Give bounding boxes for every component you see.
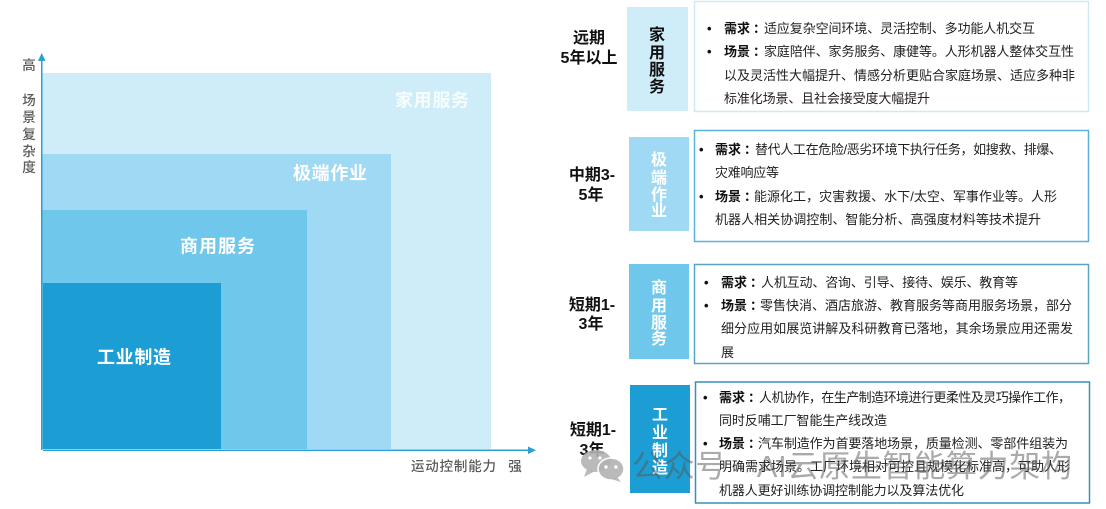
row: long term home service [561, 2, 1088, 112]
description panel: 灾难响应等 [715, 165, 779, 180]
period label [569, 166, 615, 204]
description panel: 同时反哺工厂智能生产线改造 [719, 413, 887, 428]
description panel: 机器人相关协调控制、智能分析、高强度材料等技术提升 [715, 212, 1041, 227]
description panel: 需求： [719, 390, 761, 405]
category box [627, 7, 688, 111]
x axis arrow [43, 446, 536, 454]
description panel: 家庭陪伴、家务服务、康健等。人形机器人整体交互性 [764, 44, 1074, 59]
y axis label: scene complexity: 复 [22, 126, 36, 142]
description panel: 细分应用如展览讲解及科研教育已落地，其余场景应用还需发 [721, 321, 1073, 336]
y axis label: scene complexity: 场 [22, 93, 36, 108]
description panel: • [707, 21, 712, 36]
description panel: 场景： [719, 436, 761, 451]
description panel [696, 382, 1090, 503]
description panel: 场景： [724, 44, 766, 59]
period label: 5年以上 [561, 48, 617, 67]
zone: commercial service [41, 210, 307, 449]
description panel: 人机互动、咨询、引导、接待、娱乐、教育等 [761, 275, 1018, 290]
description panel [694, 130, 1088, 242]
description panel: 场景： [721, 298, 763, 313]
description panel: 场景： [715, 189, 757, 204]
x axis label: motion control: 运动控制能力 [411, 459, 496, 474]
description panel [694, 264, 1088, 364]
category box: 工 [652, 407, 668, 424]
description panel: 展 [721, 345, 734, 360]
icon: wechat [581, 450, 624, 482]
category box: 家 [649, 25, 665, 44]
description panel: 标准化场景、且社会接受度大幅提升 [724, 91, 930, 106]
description panel: 能源化工，灾害救援、水下/太空、军事作业等。人形 [754, 189, 1057, 204]
category box: 用 [651, 298, 667, 315]
period label: 短期1- [569, 296, 615, 314]
period label: 3年 [579, 314, 603, 333]
description panel: 替代人工在危险/恶劣环境下执行任务，如搜救、排爆、 [755, 142, 1062, 157]
category box: 业 [652, 424, 668, 442]
category box: 务 [651, 329, 667, 348]
category box: 制 [652, 442, 668, 460]
category box: 极 [651, 151, 667, 169]
description panel [694, 2, 1088, 112]
row: short term industrial manufacturing [570, 382, 1090, 503]
description panel: 人机协作，在生产制造环境进行更柔性及灵巧操作工作， [759, 390, 1071, 405]
y axis label: scene complexity: 景 [22, 110, 36, 125]
category box [629, 137, 689, 231]
period label: 短期1- [570, 421, 616, 439]
description panel: • [703, 390, 708, 405]
description panel: 零售快消、酒店旅游、教育服务等商用服务场景，部分 [760, 298, 1072, 313]
watermark [581, 449, 1072, 484]
category box: 作 [651, 186, 667, 204]
nested square chart [41, 73, 491, 449]
category box: 服 [649, 62, 665, 79]
y axis label: high: 高 [22, 58, 36, 73]
description panel: • [703, 436, 708, 451]
row: mid term extreme operation [569, 130, 1088, 242]
period label: 5年 [579, 185, 603, 204]
category box: 业 [651, 202, 667, 220]
description panel: • [707, 44, 712, 59]
x axis label: strong: 强 [508, 459, 522, 474]
description panel: 需求： [724, 21, 766, 36]
category box: 务 [649, 77, 665, 96]
watermark text: 公众号 · AI云原生智能算力架构 [632, 449, 1072, 484]
zone: home service: 家用服务 [395, 90, 469, 110]
category box [629, 264, 689, 359]
description panel: • [699, 189, 704, 204]
zone: extreme operation [41, 154, 391, 449]
category box: 用 [649, 45, 665, 62]
period label: 中期3- [569, 166, 615, 184]
row: short term commercial service [569, 264, 1088, 364]
category box: 商 [651, 279, 667, 297]
description panel: • [704, 275, 709, 290]
description panel: 需求： [721, 275, 763, 290]
zone: industrial manufacturing [43, 283, 221, 449]
description panel: 机器人更好训练协调控制能力以及算法优化 [719, 483, 964, 498]
period label [569, 296, 615, 333]
description panel: • [699, 142, 704, 157]
description panel: 需求： [715, 142, 757, 157]
y axis label: scene complexity: 度 [22, 160, 36, 175]
category box: 造 [652, 459, 668, 477]
period label [570, 421, 616, 459]
period label: 3年 [580, 440, 604, 459]
y axis arrow [38, 53, 46, 450]
y axis label: scene complexity [22, 93, 36, 175]
zone: industrial manufacturing: 工业制造 [97, 348, 171, 368]
description panel: 适应复杂空间环境、灵活控制、多功能人机交互 [764, 21, 1035, 36]
period label: 远期 [573, 29, 605, 47]
zone: extreme operation: 极端作业 [293, 164, 367, 184]
description panel: 以及灵活性大幅提升、情感分析更贴合家庭场景、适应多种非 [724, 68, 1075, 83]
description panel: 明确需求场景。工厂环境相对可控且规模化标准高，可助人形 [719, 459, 1070, 474]
y axis label: scene complexity: 杂 [22, 144, 36, 159]
period label [561, 29, 617, 67]
description panel: 汽车制造作为首要落地场景，质量检测、零部件组装为 [758, 436, 1068, 451]
category box [630, 385, 690, 493]
zone: commercial service: 商用服务 [180, 236, 255, 256]
description panel: • [704, 298, 709, 313]
category box: 服 [651, 315, 667, 332]
category box: 端 [651, 169, 667, 187]
